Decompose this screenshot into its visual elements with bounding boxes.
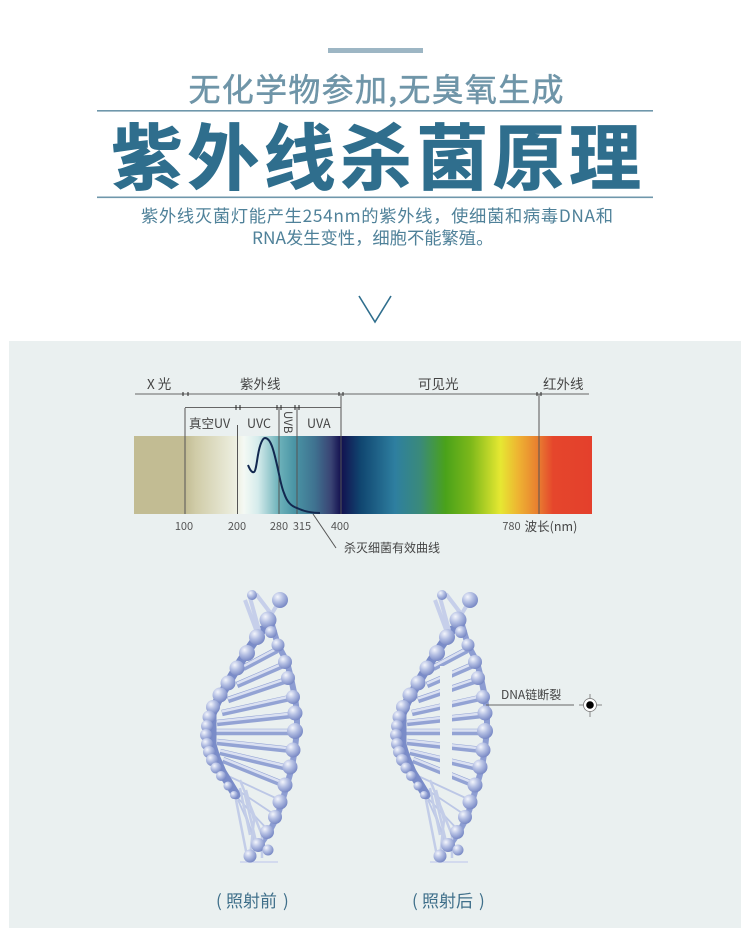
- wavelength tick labels: [175, 516, 577, 535]
- DNA after irradiation, broken rungs: [390, 590, 493, 862]
- caption: after irradiation: 照射后: [422, 887, 473, 912]
- wavelength tick labels: 780: [502, 518, 521, 534]
- sub-band labels: 真空UV: [189, 413, 231, 432]
- caption: before irradiation: ): [283, 887, 289, 912]
- caption: before irradiation: (: [216, 887, 222, 912]
- band labels top: 可见光: [418, 373, 458, 393]
- subtitle heading: 无化学物参加,无臭氧生成: [188, 65, 564, 111]
- main title: 紫外线杀菌原理: [111, 100, 641, 205]
- wavelength tick labels: 200: [228, 518, 246, 534]
- description text: RNA发生变性，细胞不能繁殖。: [252, 224, 493, 249]
- caption: after irradiation: ): [479, 887, 485, 912]
- wavelength tick labels: 315: [293, 518, 311, 534]
- wavelength tick labels: 400: [331, 518, 349, 534]
- sub-band labels: UVB: [280, 411, 296, 434]
- sub-band labels: UVC: [247, 413, 271, 432]
- caption: before irradiation: 照射前: [226, 887, 277, 912]
- curve: germicidal effectiveness: [248, 438, 320, 513]
- description text: 紫外线灭菌灯能产生254nm的紫外线，使细菌和病毒DNA和: [141, 202, 613, 227]
- top range axis: [135, 392, 589, 514]
- title rule: upper: [97, 110, 653, 112]
- top accent bar: [328, 48, 423, 53]
- band labels top: 紫外线: [240, 373, 280, 393]
- band labels top: 红外线: [543, 373, 584, 393]
- spectrum colour band: [134, 436, 592, 514]
- arrow: chevron down: [359, 296, 391, 322]
- callout: DNA strand break: DNA链断裂: [501, 686, 561, 703]
- icon: target marker: [579, 694, 602, 717]
- wavelength tick labels: 280: [270, 518, 288, 534]
- curve callout: [313, 514, 440, 556]
- chart: electromagnetic spectrum: [134, 373, 592, 556]
- sub-band labels: UVA: [307, 413, 331, 432]
- title rule: lower: [97, 196, 653, 198]
- curve callout: 杀灭细菌有效曲线: [344, 539, 440, 556]
- caption: after irradiation: (: [412, 887, 418, 912]
- panel: spectrum and DNA background: [9, 341, 741, 928]
- wavelength tick labels: 100: [175, 518, 193, 534]
- description text: [141, 202, 613, 249]
- sub-band labels: [189, 411, 331, 434]
- wavelength tick labels: 波长(nm): [525, 516, 577, 535]
- DNA before irradiation: [200, 590, 303, 862]
- band labels top: X 光: [147, 373, 171, 393]
- band labels top: [147, 373, 584, 393]
- callout: DNA strand break: [486, 686, 602, 717]
